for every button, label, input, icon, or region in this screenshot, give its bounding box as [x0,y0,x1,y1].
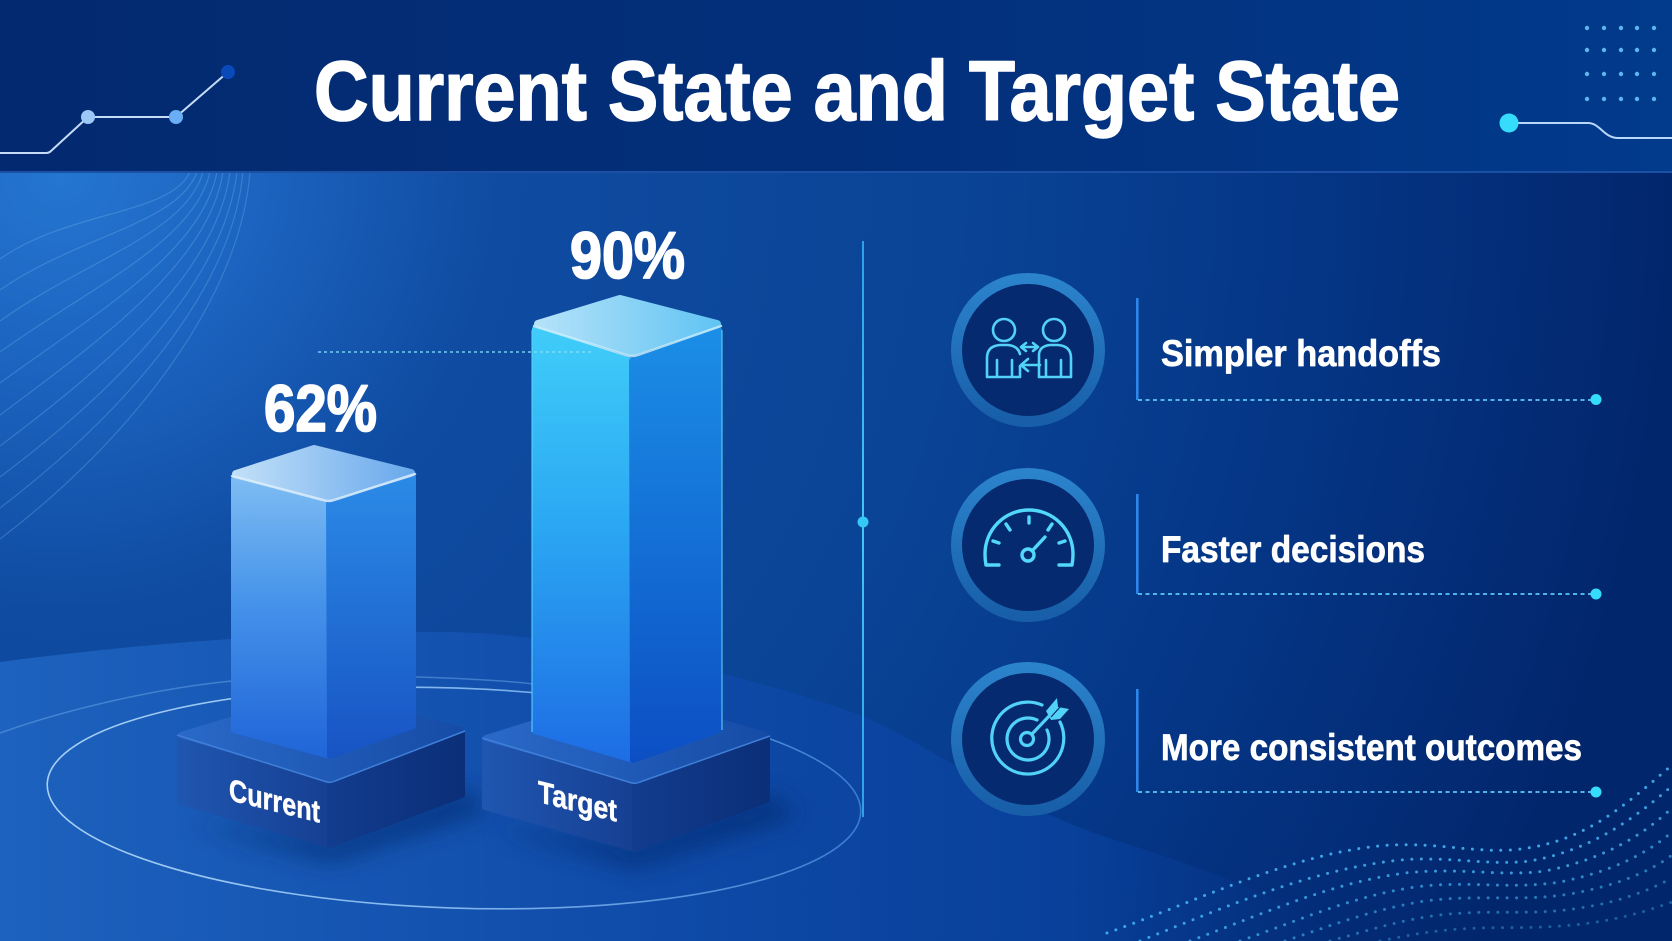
text: Simpler handoffs: Simpler handoffs [1161,333,1441,374]
item: More consistent outcomes [956,668,1602,810]
header band [0,0,1672,173]
bar chart: current vs target [177,218,800,868]
decorative dotted wave, bottom right [1107,765,1672,941]
center divider with node [858,241,868,817]
icon: speedometer [956,474,1100,616]
base: target [482,695,800,868]
bar: target 90% [532,299,722,760]
bar: current 62% [232,449,415,756]
text: More consistent outcomes: More consistent outcomes [1161,727,1582,768]
accent bracket [1136,689,1602,798]
value: 90%: 90% [570,218,685,292]
icon: target with arrow [956,668,1100,810]
label: Target: Target [538,774,617,829]
icon: people handoff [956,278,1100,422]
value: 62%: 62% [264,371,377,445]
decoration: dot grid [1585,26,1656,101]
title: Current State and Target State [314,44,1400,138]
label: Current: Current [229,772,320,830]
item: Simpler handoffs [956,278,1602,422]
floor platform [0,632,1340,941]
decorative flowing lines, top left [0,172,250,539]
accent bracket [1136,298,1602,405]
base: current [177,693,490,862]
decoration: right line with cyan node [1500,114,1672,138]
reference dashed line [318,351,591,353]
decoration: rising line with nodes [0,65,235,153]
text: Faster decisions: Faster decisions [1161,529,1425,570]
item: Faster decisions [956,474,1602,616]
accent bracket [1136,494,1602,600]
